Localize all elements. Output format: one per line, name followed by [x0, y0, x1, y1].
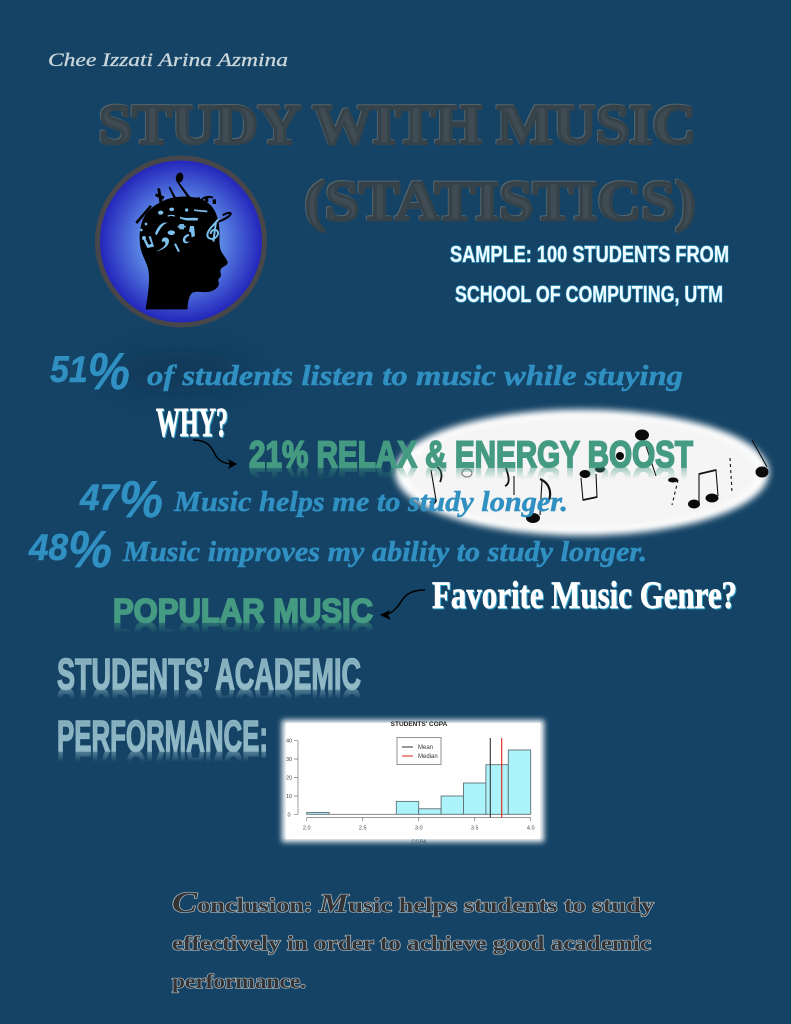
statistic: 48 percent ability: %	[68, 521, 112, 579]
statistic: 47 percent study longer: 47	[80, 477, 121, 518]
heading: students academic performance	[57, 658, 361, 760]
histogram: students CGPA	[282, 720, 544, 846]
arrow: genre to popular music	[380, 590, 425, 620]
heading: students academic performance: STUDENTS’ ACADEMIC	[57, 679, 361, 728]
axis labels: CGPA	[411, 840, 427, 846]
chart legend: Median	[418, 754, 438, 760]
chart title: STUDENTS' CGPA	[391, 721, 448, 728]
mean and median lines	[490, 738, 502, 818]
axis labels: 2.5	[359, 826, 367, 832]
axis labels: 20	[286, 776, 292, 782]
axis labels: 4.0	[527, 826, 535, 832]
conclusion: performance.	[172, 969, 306, 993]
conclusion: Conclusion: M usic helps students to study	[172, 886, 655, 919]
sample description: SCHOOL OF COMPUTING, UTM	[455, 281, 723, 307]
statistic: 48 percent ability: 48	[29, 527, 70, 568]
why label: WHY?	[156, 399, 228, 445]
statistic: 47 percent study longer: %	[119, 471, 163, 529]
conclusion: effectively in order to achieve good academic	[172, 931, 651, 955]
popular music answer: POPULAR MUSIC	[113, 615, 373, 652]
axis labels	[286, 738, 535, 846]
music notes oval image	[395, 410, 769, 536]
title: (STATISTICS)	[305, 171, 696, 233]
axis labels: 3.0	[415, 826, 423, 832]
axis labels: 3.5	[471, 826, 479, 832]
statistic: 51 percent listen: %	[88, 343, 130, 401]
conclusion	[172, 886, 655, 993]
chart legend	[397, 738, 441, 764]
axis labels: 2.0	[303, 826, 311, 832]
chart axes	[294, 741, 531, 821]
title	[99, 94, 696, 233]
statistic: 47 percent study longer: Music helps me to study longer.	[173, 486, 568, 518]
heading: students academic performance: PERFORMANCE:	[57, 741, 268, 790]
sample description	[450, 241, 729, 307]
arrow: why to relax	[193, 440, 237, 469]
statistic: 51 percent listen: 51	[50, 349, 91, 390]
icon: head with music notes	[98, 158, 264, 325]
statistic: 47 percent study longer	[79, 471, 568, 529]
histogram bars	[307, 750, 531, 814]
axis labels: 10	[286, 794, 292, 800]
statistic: 21 percent relax and energy boost: 21% RELAX & ENERGY BOOST	[249, 459, 693, 500]
axis labels: 40	[286, 738, 292, 744]
heading: students academic performance: PERFORMANCE:	[57, 712, 268, 761]
popular music answer: POPULAR MUSIC	[113, 592, 373, 629]
statistic: 51 percent listen	[50, 343, 683, 401]
statistic: 21 percent relax and energy boost	[249, 440, 694, 478]
axis labels: 0	[287, 812, 291, 818]
statistic: 48 percent ability: Music improves my ability to study longer.	[122, 536, 647, 568]
title: STUDY WITH MUSIC	[99, 94, 696, 156]
chart legend: Mean	[418, 745, 433, 751]
heading: students academic performance: STUDENTS’ ACADEMIC	[57, 650, 361, 699]
statistic: 48 percent ability	[28, 521, 647, 579]
statistic: 51 percent listen: of students listen to music while stuying	[147, 360, 683, 392]
axis labels: 30	[286, 757, 292, 763]
statistic: 21 percent relax and energy boost: 21% RELAX & ENERGY BOOST	[249, 434, 693, 475]
author name: Chee Izzati Arina Azmina	[48, 50, 288, 71]
